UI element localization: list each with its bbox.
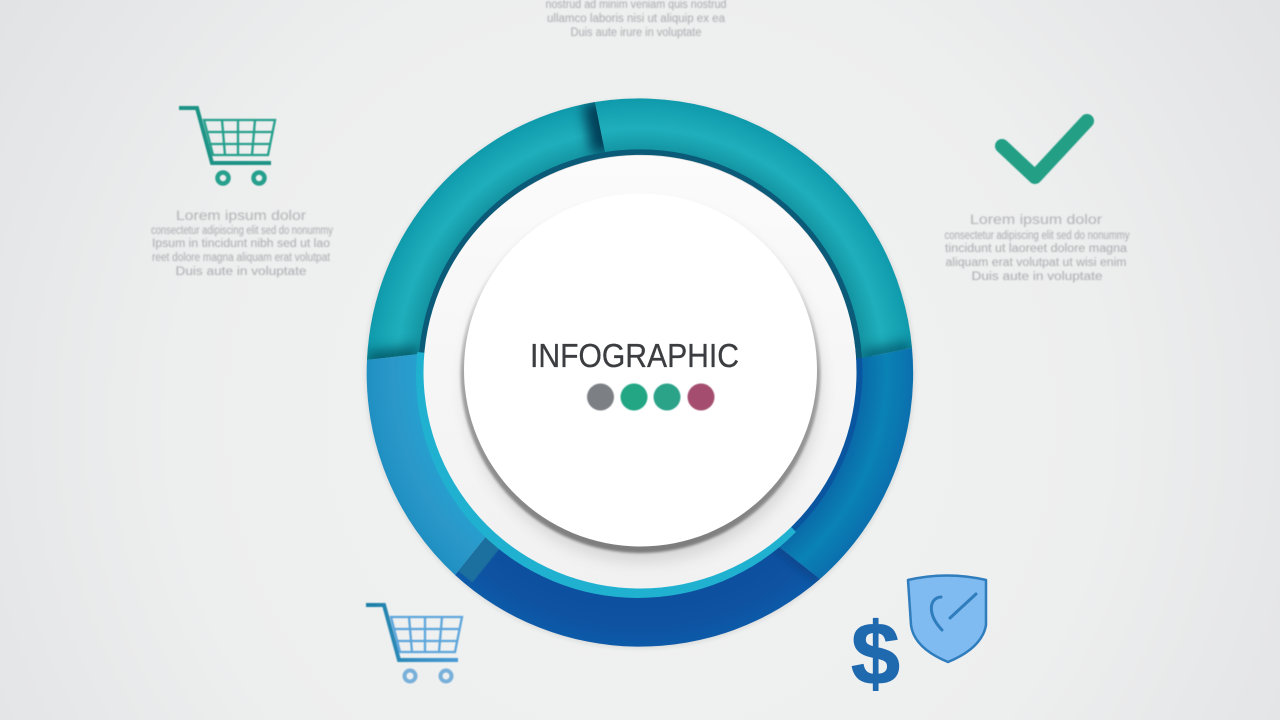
text: left description: Duis aute in voluptate	[176, 266, 306, 278]
top text block: Duis aute irure in voluptate	[570, 27, 702, 39]
segment: bottom dark blue	[455, 537, 820, 647]
text: right description: aliquam erat volutpat ut wisi enim	[946, 257, 1126, 269]
text: left description	[151, 207, 333, 278]
text: left description: Lorem ipsum dolor	[176, 207, 306, 223]
top text block	[546, 0, 726, 39]
text: right description: consectetur adipiscing elit sed do nonummy	[944, 230, 1130, 242]
white inner plate	[424, 156, 856, 588]
inner edge: cyan lower crescent	[416, 352, 796, 598]
text: right description	[944, 211, 1130, 283]
inner edge: dark blue right arc	[783, 358, 860, 540]
icon: blue shopping cart	[366, 605, 462, 682]
legend dots	[587, 384, 714, 410]
text: right description: tincidunt ut laoreet dolore magna	[945, 243, 1128, 255]
panel: right check block	[944, 121, 1130, 283]
title: INFOGRAPHIC	[530, 337, 739, 374]
top text block: ullamco laboris nisi ut aliquip ex ea	[547, 13, 726, 25]
disc face	[464, 194, 817, 546]
text: right description: Lorem ipsum dolor	[970, 211, 1102, 227]
icon: teal shopping cart	[179, 108, 275, 184]
disc rim	[460, 193, 820, 553]
inner edge: dark teal upper arc	[417, 147, 864, 358]
text: left description: consectetur adipiscing elit sed do nonummy	[151, 225, 333, 237]
segment: right blue	[780, 348, 914, 579]
ring soft shadow	[366, 100, 914, 648]
text: left description: Ipsum in tincidunt nibh sed ut lao	[152, 238, 330, 250]
icon: security shield	[908, 576, 986, 662]
segment: top right teal	[590, 95, 920, 365]
chart: segmented donut ring	[360, 95, 920, 650]
panel: left shopping block	[151, 108, 333, 278]
center disc	[460, 193, 820, 560]
icon: green check mark	[1002, 121, 1087, 177]
disc cast shadow	[467, 208, 819, 560]
text: right description: Duis aute in voluptate	[972, 271, 1102, 283]
segment: top left teal	[360, 95, 610, 365]
segment: lower left light blue	[367, 354, 488, 575]
icon: dollar sign: $	[851, 604, 900, 703]
text: left description: reet dolore magna aliquam erat volutpat	[152, 252, 331, 264]
